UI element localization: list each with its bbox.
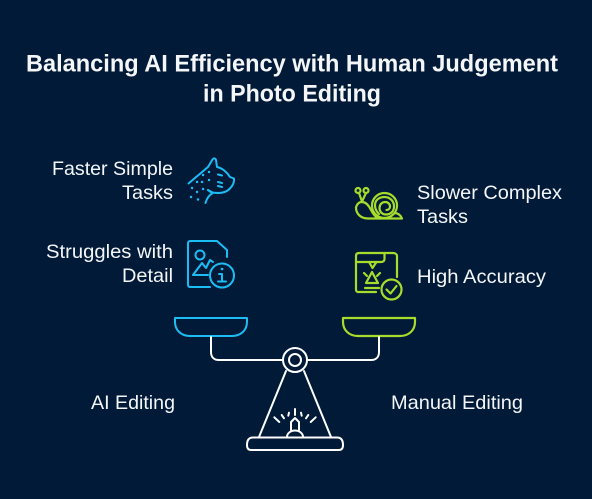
pivot — [283, 348, 307, 372]
label: Manual Editing: Manual Editing — [391, 392, 523, 414]
label: Faster Simple Tasks: Faster Simple — [52, 158, 173, 180]
icon: image file with info — [188, 241, 234, 288]
beam — [211, 337, 379, 360]
label: Faster Simple Tasks — [52, 158, 173, 204]
label: Struggles with Detail: Detail — [122, 265, 173, 287]
label: High Accuracy: High Accuracy — [417, 266, 546, 288]
title — [26, 50, 558, 108]
right pan — [343, 318, 415, 336]
title: in Photo Editing — [203, 80, 381, 108]
base — [247, 438, 343, 450]
scale — [175, 318, 415, 450]
label: Faster Simple Tasks: Tasks — [122, 182, 173, 204]
label: Slower Complex Tasks: Tasks — [417, 206, 468, 228]
label: Struggles with Detail — [46, 241, 173, 287]
stand — [259, 371, 331, 437]
icon: cheetah — [188, 158, 234, 203]
icon: light and rays — [274, 409, 316, 437]
label: Struggles with Detail: Struggles with — [46, 241, 173, 263]
icon: checklist document with check — [356, 253, 402, 300]
left pan — [175, 318, 247, 336]
icon: snail — [356, 188, 402, 218]
label: AI Editing: AI Editing — [91, 392, 175, 414]
label: Slower Complex Tasks — [417, 182, 562, 228]
title: Balancing AI Efficiency with Human Judgement — [26, 50, 558, 78]
label: Slower Complex Tasks: Slower Complex — [417, 182, 562, 204]
